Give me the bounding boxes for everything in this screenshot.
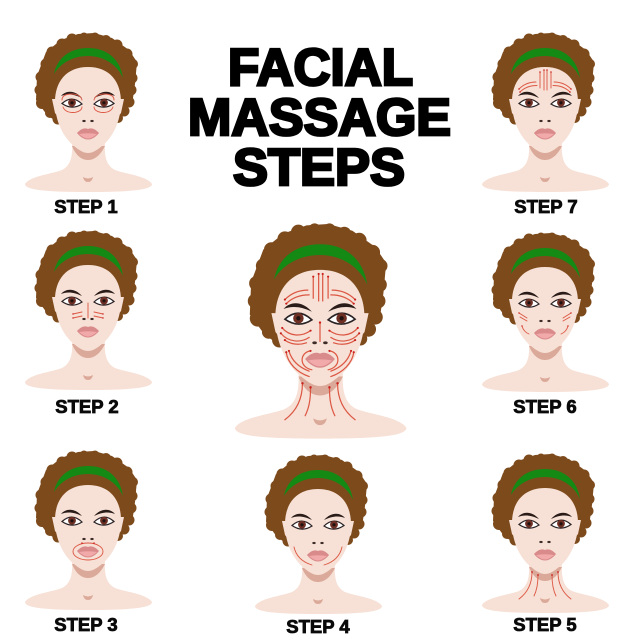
- title: STEPS: [233, 139, 405, 197]
- step 4 figure: jaw massage: [255, 454, 382, 614]
- step 3 figure: mouth massage: [25, 450, 152, 610]
- step 5 label: STEP 5: [513, 614, 577, 635]
- step 2 figure: nose massage: [25, 230, 152, 390]
- central figure: all massage lines: [235, 223, 406, 439]
- title: [188, 39, 451, 197]
- step 2 label: STEP 2: [55, 396, 119, 417]
- step 1 figure: eye massage: [25, 32, 152, 192]
- step 4 label: STEP 4: [286, 616, 350, 637]
- step 3 label: STEP 3: [54, 614, 118, 635]
- step 1 label: STEP 1: [54, 196, 118, 217]
- title: MASSAGE: [188, 89, 451, 147]
- step 7 figure: forehead massage: [482, 32, 609, 192]
- step 7 label: STEP 7: [514, 196, 578, 217]
- step 6 figure: cheek massage: [482, 232, 609, 392]
- step 5 figure: neck massage: [482, 454, 609, 613]
- step 6 label: STEP 6: [513, 396, 577, 417]
- title: FACIAL: [228, 39, 413, 97]
